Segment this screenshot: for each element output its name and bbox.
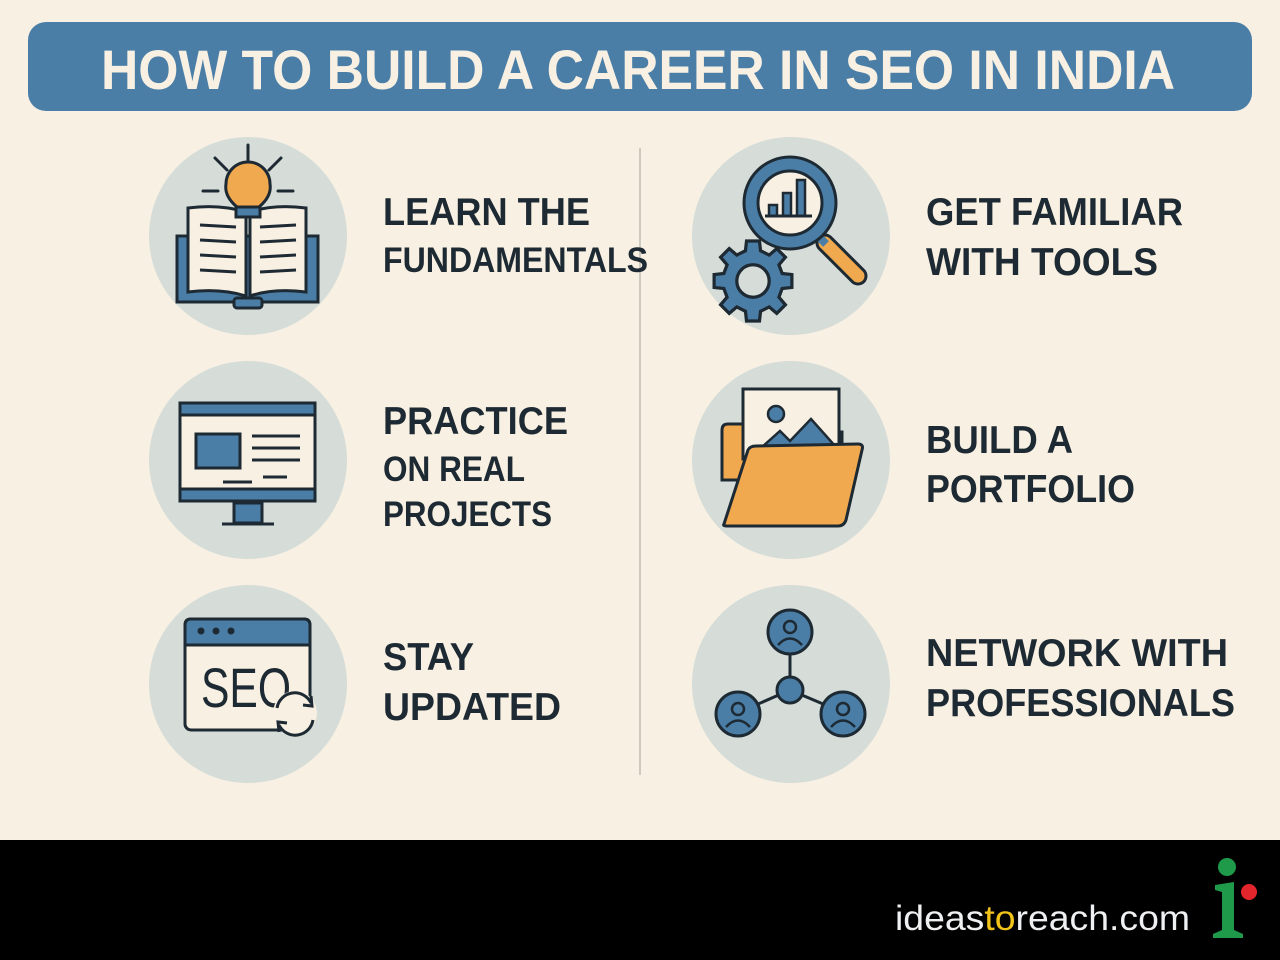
footer xyxy=(0,840,1280,960)
heading xyxy=(383,191,648,280)
heading: WITH TOOLS xyxy=(926,241,1158,284)
panel: portfolio xyxy=(692,361,1135,559)
heading: FUNDAMENTALS xyxy=(383,241,648,280)
heading: ON REAL xyxy=(383,450,525,489)
heading xyxy=(383,400,568,534)
heading: UPDATED xyxy=(383,686,561,729)
heading: GET FAMILIAR xyxy=(926,191,1183,234)
heading: PROJECTS xyxy=(383,495,552,534)
panel: practice on real projects xyxy=(149,361,568,559)
title: HOW TO BUILD A CAREER IN SEO IN INDIA xyxy=(101,38,1175,101)
icon: SEO browser xyxy=(149,585,347,783)
icon: book and lightbulb xyxy=(149,137,347,335)
icon: network nodes xyxy=(692,585,890,783)
icon: logo xyxy=(1213,858,1257,938)
heading: PORTFOLIO xyxy=(926,468,1135,511)
icon: SEO browser: SEO xyxy=(201,656,291,719)
heading: BUILD A xyxy=(926,419,1073,462)
heading xyxy=(383,636,561,729)
heading: PRACTICE xyxy=(383,400,568,443)
heading: NETWORK WITH xyxy=(926,632,1228,675)
heading: PROFESSIONALS xyxy=(926,682,1235,725)
heading xyxy=(926,632,1235,725)
heading: LEARN THE xyxy=(383,191,590,234)
panel: learn the fundamentals xyxy=(149,137,648,335)
panel: tools xyxy=(692,137,1183,335)
brand text: ideastoreach.com xyxy=(895,899,1190,938)
icon: folder xyxy=(692,361,890,559)
panel: stay updated xyxy=(149,585,561,783)
title xyxy=(28,22,1252,111)
heading: STAY xyxy=(383,636,474,679)
icon: monitor xyxy=(149,361,347,559)
panel: network xyxy=(692,585,1235,783)
icon: magnifier and gear xyxy=(692,137,890,335)
heading xyxy=(926,191,1183,284)
heading xyxy=(926,419,1135,511)
